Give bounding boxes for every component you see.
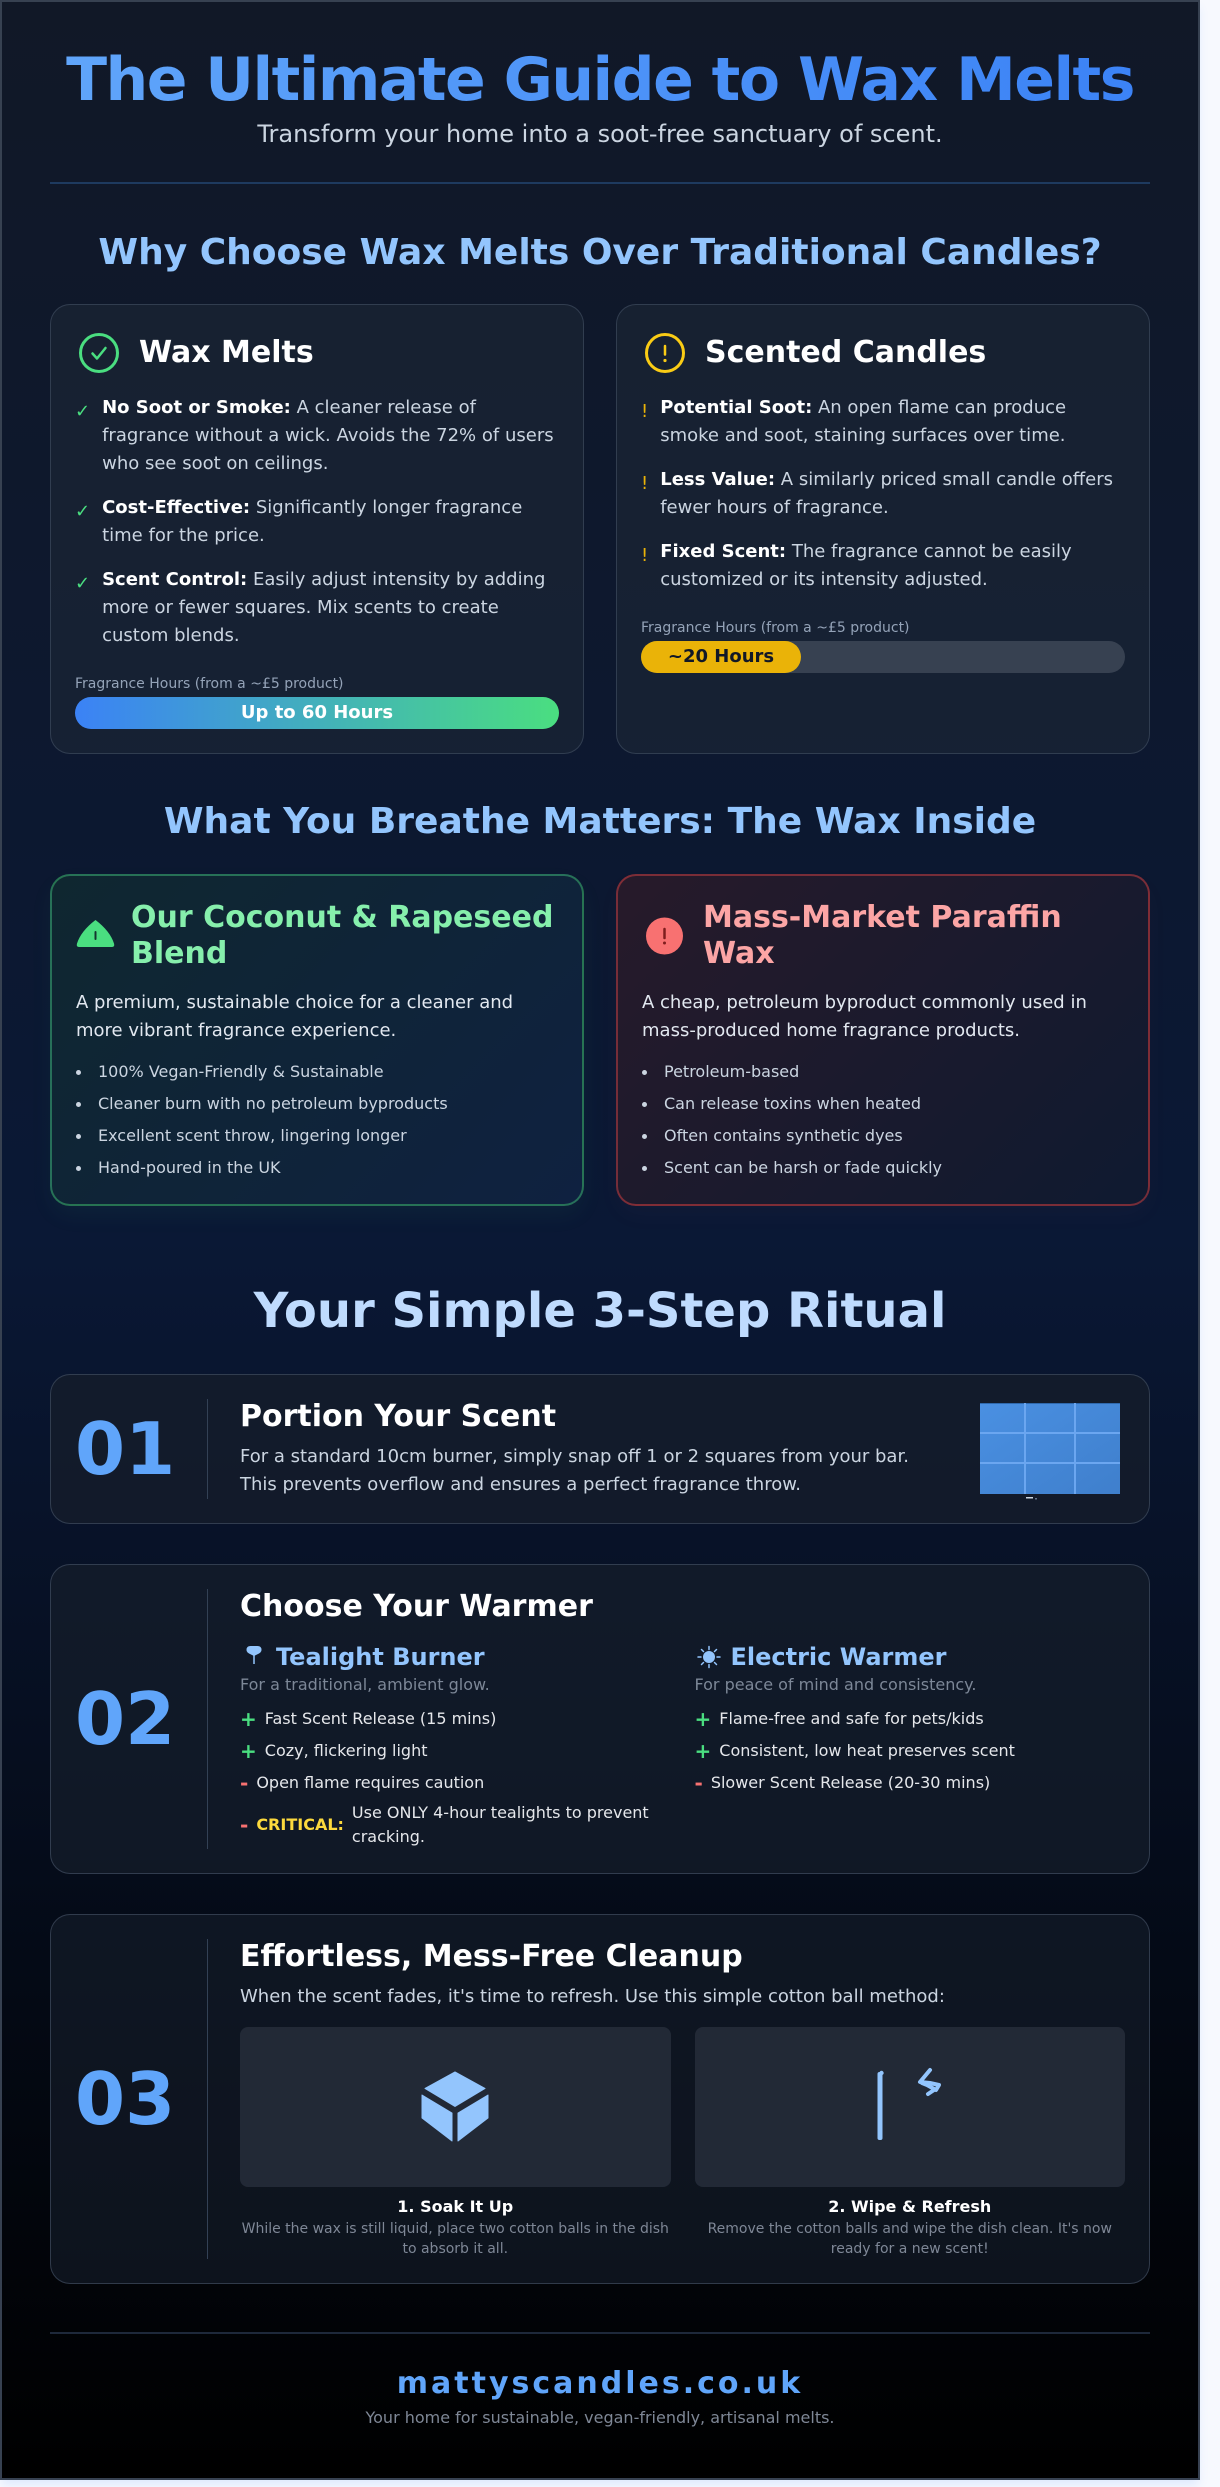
step number: 03 [75,2057,175,2141]
drawback: soot [641,397,1066,446]
step 1 content [207,1399,1125,1499]
benefit: cost effective: Cost-Effective: Significantly longer fragrance [102,497,522,518]
step title: Portion Your Scent [240,1399,556,1434]
drawback: soot: smoke and soot, staining surfaces over time. [660,425,1066,446]
heading: why choose wax melts: Why Choose Wax Melts Over Traditional Candles? [98,232,1102,273]
pro: Cozy, flickering light [265,1741,428,1760]
pro: Flame-free and safe for pets/kids [719,1709,984,1728]
drawback: value [641,469,1113,518]
critical warning: - [240,1813,248,1837]
caption: soak: 1. Soak It Up [397,2197,513,2216]
con: Open flame requires caution [256,1773,484,1792]
description [76,992,513,1041]
bullet list [642,1062,942,1177]
step 3 content [207,1939,1125,2259]
cleanup steps [240,2011,1125,2259]
step title: Choose Your Warmer [240,1589,593,1624]
pro: + [694,1707,711,1731]
chart label: Fragrance Hours (from a ~£5 product) [641,620,910,636]
benefit: cost effective: ✓ [75,501,90,522]
benefit: no soot: who see soot on ceilings. [102,453,328,474]
header [50,50,1150,184]
bullet list: Excellent scent throw, lingering longer [98,1126,407,1145]
pro: Consistent, low heat preserves scent [719,1741,1015,1760]
chart label: Fragrance Hours (from a ~£5 product) [75,676,344,692]
bullet list: Often contains synthetic dyes [664,1126,903,1145]
benefit: scent control: custom blends. [102,625,240,646]
bullet list: Petroleum-based [664,1062,799,1081]
icon: sun [697,1646,721,1668]
panel: step 1 [50,1374,1150,1524]
icon: tealight [246,1646,262,1664]
caption: wipe [694,2195,1125,2259]
critical warning: Use ONLY 4-hour tealights to prevent cracking. [352,1803,649,1846]
step number: 01 [75,1407,175,1491]
section: comparison [50,232,1150,754]
caption: soak: to absorb it all. [402,2241,508,2257]
benefit: scent control: Scent Control: Easily adjust intensity by adding [102,569,545,590]
heading: 3-step ritual: Your Simple 3-Step Ritual [254,1283,946,1339]
bullet list [76,1062,448,1177]
bar chart: 60 hours [75,697,559,729]
description: more vibrant fragrance experience. [76,1020,396,1041]
card heading: scented candles [645,333,986,373]
benefit: no soot: ✓ [75,401,90,422]
description [642,992,1087,1041]
benefit: no soot: fragrance without a wick. Avoids the 72% of users [102,425,554,446]
caption: wipe: ready for a new scent! [831,2241,989,2257]
pro: + [694,1739,711,1763]
comparison cards [50,304,1150,754]
warmer options [240,1643,1015,1846]
icon: cube [420,2070,490,2144]
benefit: scent control: more or fewer squares. Mix scents to create [102,597,499,618]
drawback: fixed scent: ! [641,545,648,566]
icon: warning circle [645,333,685,373]
panel: wax melts [50,304,584,754]
caption: soak [240,2195,670,2259]
drawback: soot: Potential Soot: An open flame can produce [660,397,1066,418]
benefit: scent control [75,569,545,646]
benefit: cost effective [75,497,522,546]
con: - [694,1771,703,1795]
caption: wipe: Remove the cotton balls and wipe the dish clean. It's now [708,2221,1112,2237]
benefit: scent control: ✓ [75,573,90,594]
step text: When the scent fades, it's time to refresh. Use this simple cotton ball method: [240,1986,945,2007]
icon: check circle [79,333,119,373]
wax title [131,900,553,971]
drawback: value: ! [641,473,648,494]
option: electric warmer [694,1643,1015,1795]
icon: leaf dome [76,920,114,947]
wax title [703,900,1062,971]
brand: mattyscandles.co.uk [397,2366,803,2401]
bar chart: 60 hours: Up to 60 Hours [241,702,393,723]
wax title: Wax [703,936,775,971]
drawback: fixed scent [641,541,1072,590]
card title: Scented Candles [705,335,986,370]
bullet list: Can release toxins when heated [664,1094,921,1113]
pro [240,1739,428,1763]
pro: + [240,1707,257,1731]
step text [240,1446,909,1495]
bar chart: 20 hours [641,641,1125,673]
drawback: value: Less Value: A similarly priced small candle offers [660,469,1113,490]
icon: alert circle [646,918,683,954]
bullet list: 100% Vegan-Friendly & Sustainable [98,1062,384,1081]
drawback: fixed scent: Fixed Scent: The fragrance cannot be easily [660,541,1072,562]
title: The Ultimate Guide to Wax Melts [66,45,1134,115]
option subtitle: For peace of mind and consistency. [694,1675,976,1694]
drawback: value: fewer hours of fragrance. [660,497,889,518]
con: - [240,1771,248,1795]
drawback: soot: ! [641,401,648,422]
step 2 content [207,1589,1125,1849]
panel: coconut and rapeseed [50,874,584,1206]
option heading: Tealight Burner [276,1643,485,1671]
bullet list: Cleaner burn with no petroleum byproducts [98,1094,448,1113]
option heading: Electric Warmer [730,1643,947,1671]
caption: soak: While the wax is still liquid, place two cotton balls in the dish [242,2221,669,2237]
pro: Fast Scent Release (15 mins) [265,1709,496,1728]
bullet list: Hand-poured in the UK [98,1158,281,1177]
step number: 02 [75,1677,175,1761]
cleanup: soak it up [240,2011,670,2259]
step text: For a standard 10cm burner, simply snap off 1 or 2 squares from your bar. [240,1446,909,1467]
caption: wipe: 2. Wipe & Refresh [828,2197,991,2216]
wax heading [646,900,1062,971]
illustration: wax bar grid [980,1403,1120,1500]
panel: scented candles [616,304,1150,754]
card heading: wax melts [79,333,314,373]
benefit: no soot: No Soot or Smoke: A cleaner release of [102,397,476,418]
illustration box: soak [240,2027,670,2187]
panel: step 2 [50,1564,1150,1874]
tagline: Your home for sustainable, vegan-friendly, artisanal melts. [365,2408,835,2427]
description: mass-produced home fragrance products. [642,1020,1020,1041]
step text: This prevents overflow and ensures a perfect fragrance throw. [240,1474,801,1495]
wax cards [50,874,1150,1206]
section: wax types [50,801,1150,1206]
footer [50,2332,1150,2430]
panel: step 3 [50,1914,1150,2284]
heading: the wax inside: What You Breathe Matters: The Wax Inside [164,801,1036,842]
benefit: cost effective: time for the price. [102,525,265,546]
wax title: Mass-Market Paraffin [703,900,1062,935]
description: A cheap, petroleum byproduct commonly used in [642,992,1087,1013]
drawback: fixed scent: customized or its intensity adjusted. [660,569,988,590]
wax title: Blend [131,936,227,971]
option subtitle: For a traditional, ambient glow. [240,1675,490,1694]
card title: Wax Melts [139,335,314,370]
icon: cloth and sparkle [872,2065,952,2145]
cleanup: wipe and refresh [694,2011,1125,2259]
pro: + [240,1739,257,1763]
step title: Effortless, Mess-Free Cleanup [240,1939,743,1974]
illustration box: wipe [694,2027,1125,2187]
bar chart: 20 hours: ~20 Hours [668,646,774,667]
benefit: no soot [75,397,554,474]
critical warning: CRITICAL: [256,1815,344,1834]
description: A premium, sustainable choice for a cleaner and [76,992,513,1013]
bullet list: Scent can be harsh or fade quickly [664,1158,942,1177]
subtitle: Transform your home into a soot-free sanctuary of scent. [257,120,943,148]
panel: paraffin [616,874,1150,1206]
wax title: Our Coconut & Rapeseed [131,900,553,935]
option: tealight burner [240,1643,649,1846]
con: Slower Scent Release (20-30 mins) [711,1773,990,1792]
wax heading [76,900,553,971]
